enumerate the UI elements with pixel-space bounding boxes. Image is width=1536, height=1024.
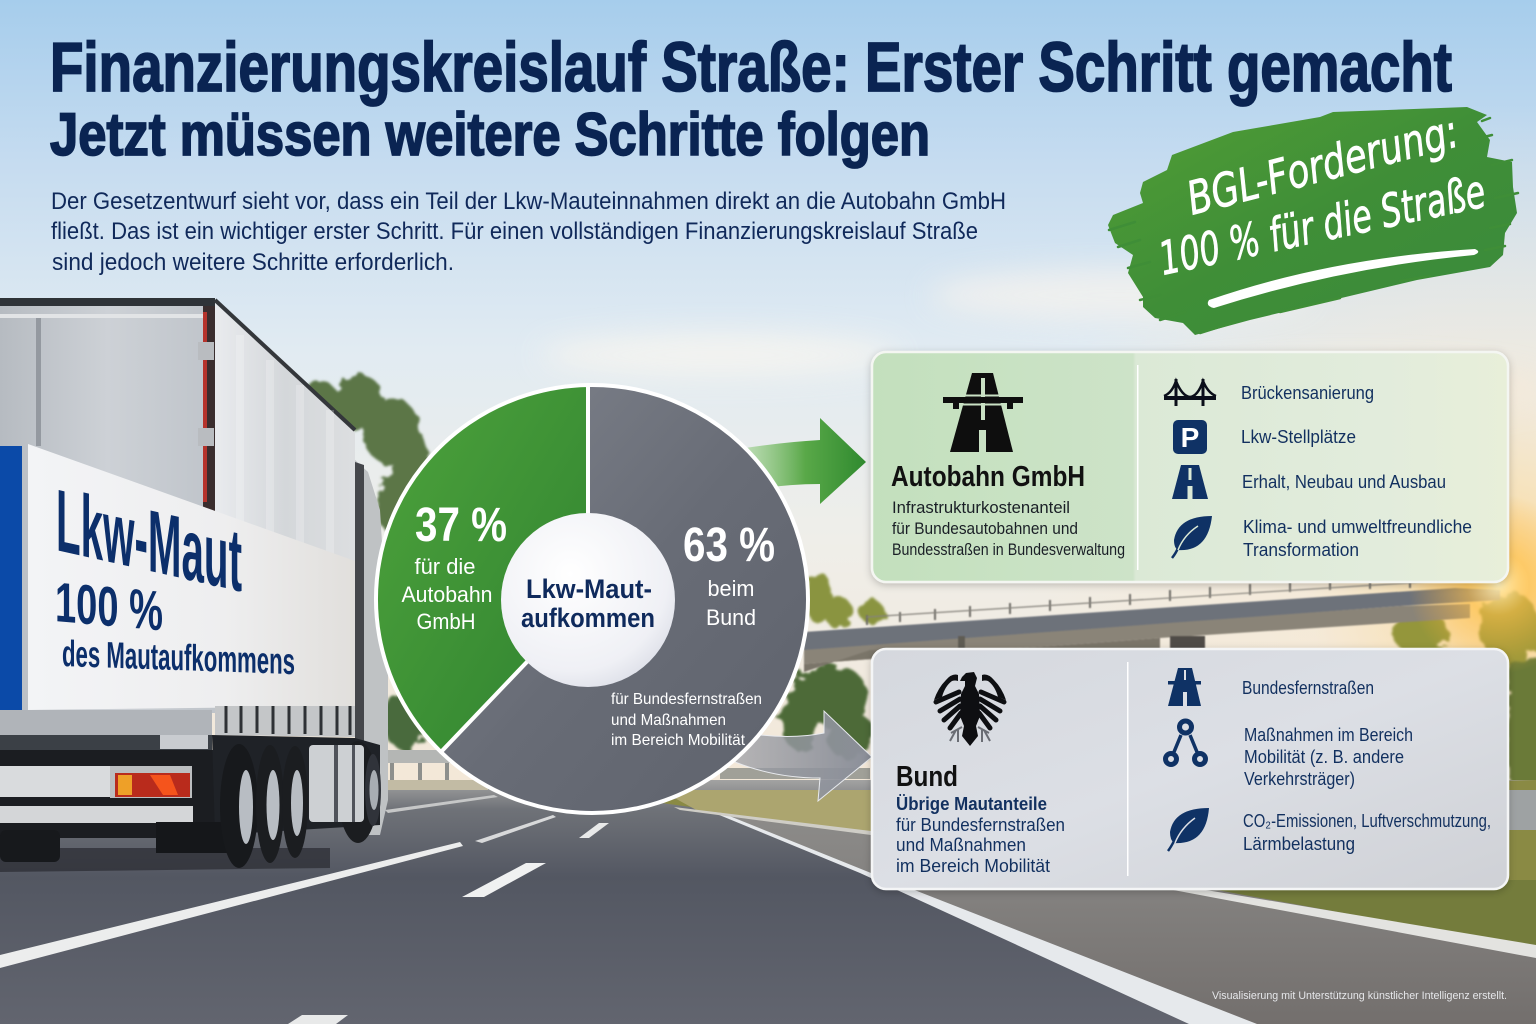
sun <box>1380 480 1536 700</box>
label: use of the 63 %: im Bereich Mobilität <box>611 732 746 749</box>
label: 63 %: 63 % <box>683 519 775 572</box>
heading: Autobahn GmbH <box>891 461 1085 493</box>
intro text: fließt. Das ist ein wichtiger erster Schritt. Für einen vollständigen Finanzierungskreislauf Straße <box>51 218 978 245</box>
panel: Autobahn GmbH <box>872 352 1508 582</box>
hub label: aufkommen <box>521 603 655 633</box>
hub label <box>521 574 655 633</box>
list: CO₂-Emissionen, Luftverschmutzung, <box>1243 811 1491 831</box>
description: Infrastrukturkostenanteil <box>892 498 1070 517</box>
icon: motorway <box>1168 668 1201 706</box>
heading: Bund <box>896 761 958 793</box>
hub label: Lkw-Maut- <box>526 574 652 604</box>
description <box>896 794 1065 876</box>
trailer underside <box>0 710 212 735</box>
background: trees <box>300 374 1536 792</box>
title: Jetzt müssen weitere Schritte folgen <box>50 101 930 168</box>
label: 37 % <box>402 499 507 634</box>
arrow: to Autobahn GmbH <box>745 418 866 504</box>
intro text: sind jedoch weitere Schritte erforderlich. <box>52 249 454 276</box>
list <box>1242 678 1491 854</box>
list: Lärmbelastung <box>1243 834 1355 854</box>
description: für Bundesfernstraßen <box>896 815 1065 835</box>
label: 37 %: Autobahn <box>402 582 492 607</box>
icon: bridge <box>1164 379 1216 406</box>
icon: network <box>1166 721 1206 764</box>
icon: leaf <box>1172 516 1212 558</box>
title <box>50 28 1452 168</box>
label: 37 %: 37 % <box>415 499 507 552</box>
list: Erhalt, Neubau und Ausbau <box>1242 471 1446 492</box>
segment: 37 % <box>376 385 588 752</box>
donut chart <box>376 385 808 813</box>
segment: 63 % <box>441 385 808 813</box>
hub <box>501 513 675 687</box>
callout: BGL demand: BGL-Forderung: <box>1181 104 1464 226</box>
icon: federal eagle <box>934 672 1006 746</box>
banner <box>28 444 355 710</box>
list: Klima- und umweltfreundliche <box>1243 516 1472 537</box>
wheels <box>220 741 381 868</box>
label: use of the 63 %: für Bundesfernstraßen <box>611 691 762 708</box>
list: Maßnahmen im Bereich <box>1244 725 1413 745</box>
description: im Bereich Mobilität <box>896 856 1050 876</box>
footnote: Visualisierung mit Unterstützung künstlicher Intelligenz erstellt. <box>1212 990 1507 1002</box>
icon: parking <box>1173 420 1207 454</box>
trailer curtain side <box>215 303 355 735</box>
background: road <box>0 750 1536 1024</box>
bumper <box>0 766 110 797</box>
intro text <box>51 188 1006 276</box>
label: 63 % <box>683 519 775 630</box>
icon: parking: P <box>1181 422 1199 453</box>
background: bridge <box>804 580 1500 672</box>
description <box>892 498 1125 559</box>
description: und Maßnahmen <box>896 835 1026 855</box>
list: Lkw-Stellplätze <box>1241 426 1356 447</box>
arrow: to Bund <box>735 711 872 801</box>
blue band <box>0 446 22 711</box>
banner: Lkw-Maut <box>56 470 242 610</box>
label: 37 %: GmbH <box>416 609 476 634</box>
list: Verkehrsträger) <box>1244 769 1355 789</box>
label: 63 %: Bund <box>706 605 756 630</box>
truck <box>0 298 388 872</box>
icon: motorway <box>943 373 1023 452</box>
intro text: Der Gesetzentwurf sieht vor, dass ein Teil der Lkw-Mauteinnahmen direkt an die Autobahn GmbH <box>51 188 1006 215</box>
description: Übrige Mautanteile <box>896 794 1047 814</box>
description: Bundesstraßen in Bundesverwaltung <box>892 540 1125 559</box>
panel: Bund <box>872 649 1508 889</box>
list: Bundesfernstraßen <box>1242 678 1374 698</box>
list: Brückensanierung <box>1241 382 1374 403</box>
trailer rear <box>0 303 215 713</box>
label: use of the 63 % <box>611 691 762 749</box>
list <box>1241 382 1472 560</box>
label: 63 %: beim <box>708 576 754 601</box>
label: use of the 63 %: und Maßnahmen <box>611 712 726 729</box>
tractor cab <box>355 460 388 835</box>
tail light <box>115 773 190 797</box>
description: für Bundesautobahnen und <box>892 519 1078 538</box>
banner figure: 100 % <box>55 570 163 642</box>
list: Mobilität (z. B. andere <box>1244 747 1404 767</box>
list: Transformation <box>1243 539 1359 560</box>
label: 37 %: für die <box>414 554 476 579</box>
banner caption: des Mautaufkommens <box>62 632 295 682</box>
icon: leaf <box>1168 808 1209 851</box>
callout: BGL demand <box>1108 104 1518 335</box>
icon: road <box>1172 465 1208 499</box>
